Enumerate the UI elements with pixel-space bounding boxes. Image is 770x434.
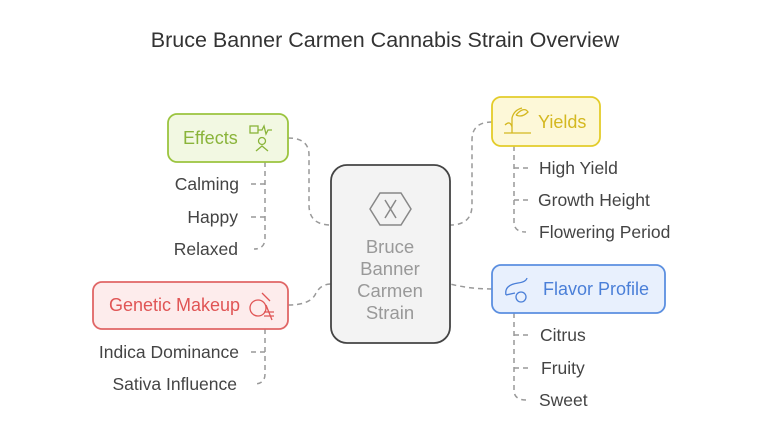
panel: center: Banner (360, 258, 420, 279)
panel: center (331, 165, 450, 343)
panel: yields: Yields (538, 112, 586, 132)
icon: hexagon (370, 193, 411, 225)
genetic items: Sativa Influence (112, 374, 237, 394)
icon: plant (504, 108, 531, 133)
panel: effects (168, 114, 288, 162)
flavor items: Sweet (539, 390, 588, 410)
panel: flavor profile: Flavor Profile (543, 279, 649, 299)
yields items: Flowering Period (539, 222, 670, 242)
title: Bruce Banner Carmen Cannabis Strain Overview (151, 28, 620, 52)
panel: center: Bruce (366, 236, 414, 257)
yields items (538, 158, 670, 242)
panel: flavor profile (492, 265, 665, 313)
panel: genetic makeup (93, 282, 288, 329)
icon: apple dna (250, 293, 274, 320)
genetic items: Indica Dominance (99, 342, 239, 362)
panel: yields (492, 97, 600, 146)
icon: pepper (506, 278, 527, 302)
effects items: Happy (187, 207, 238, 227)
panel: genetic makeup: Genetic Makeup (109, 295, 240, 315)
effects items (174, 174, 239, 259)
flavor items: Citrus (540, 325, 586, 345)
yields items: Growth Height (538, 190, 650, 210)
icon: effects (250, 126, 272, 151)
panel: center: Carmen (357, 280, 423, 301)
effects items: Calming (175, 174, 239, 194)
panel: effects: Effects (183, 128, 238, 148)
flavor items (539, 325, 588, 410)
genetic items (99, 342, 239, 394)
panel: center: Strain (366, 302, 414, 323)
effects items: Relaxed (174, 239, 238, 259)
connectors (250, 122, 528, 400)
flavor items: Fruity (541, 358, 585, 378)
yields items: High Yield (539, 158, 618, 178)
